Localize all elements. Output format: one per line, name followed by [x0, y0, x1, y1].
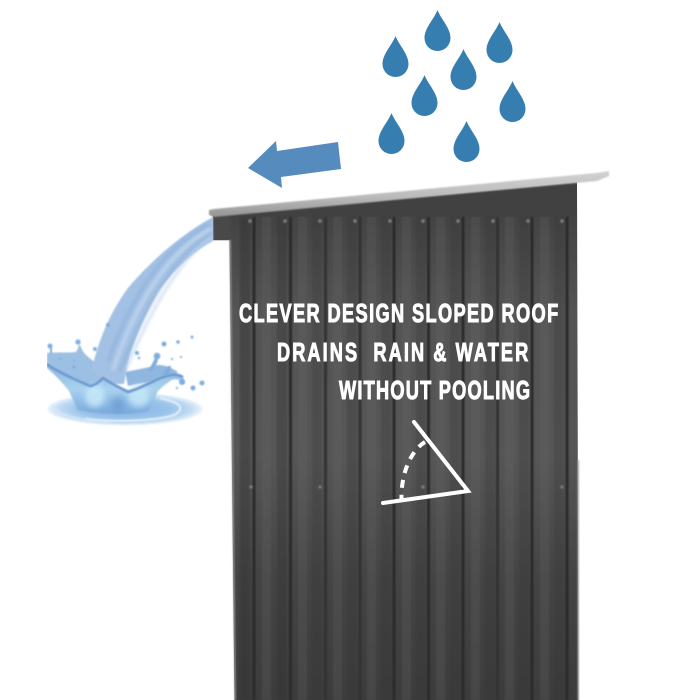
- droplets: [48, 323, 204, 390]
- back wall of splash, left: [47, 344, 100, 385]
- sloped roof: [209, 171, 609, 217]
- line 1: CLEVER DESIGN SLOPED ROOF: [239, 299, 558, 328]
- back wall of splash, right: [125, 365, 178, 386]
- crown inner glow: [85, 385, 105, 407]
- water stream and splash: [47, 217, 213, 426]
- crown rim: [47, 364, 183, 392]
- rain drops: [378, 10, 526, 162]
- headline text: [239, 299, 558, 405]
- shed wall: [213, 182, 578, 700]
- shed: [209, 171, 609, 700]
- line 2: DRAINS RAIN & WATER: [277, 338, 528, 367]
- water stream: [92, 217, 213, 384]
- pool ripples: [47, 392, 203, 426]
- arrow pointing left down the roof: [248, 141, 341, 188]
- corrugated ribs: [213, 216, 579, 700]
- line 3: WITHOUT POOLING: [339, 376, 530, 405]
- splash crown front: [47, 362, 184, 414]
- rivets: [248, 219, 564, 489]
- soffit band: [213, 182, 577, 217]
- stream highlights: [108, 224, 212, 372]
- icon: roof angle: [383, 422, 468, 503]
